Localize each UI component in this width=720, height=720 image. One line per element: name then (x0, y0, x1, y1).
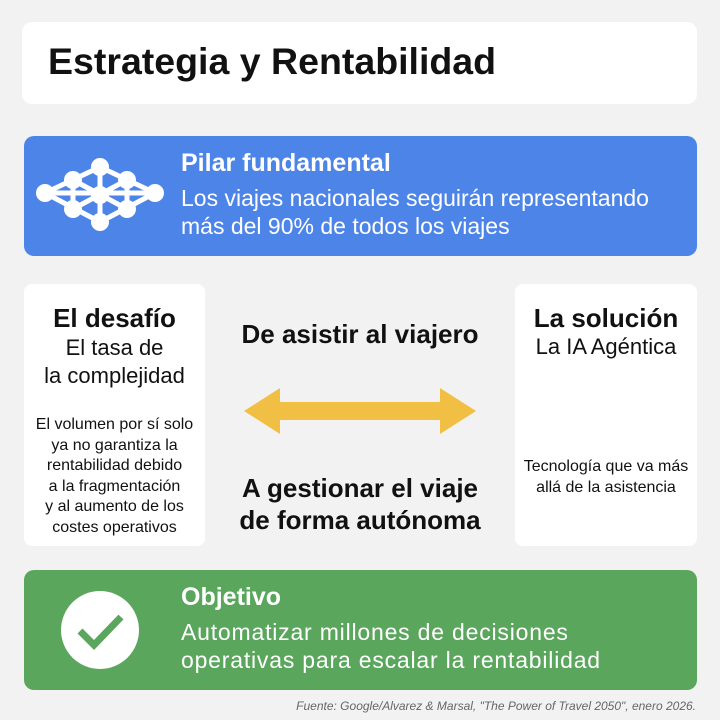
heading: Pilar fundamental (181, 149, 391, 177)
heading: El desafío (53, 303, 176, 333)
panel: el desafío (24, 284, 205, 546)
text (181, 619, 601, 673)
heading: Objetivo (181, 583, 281, 611)
text: y al aumento de los (45, 498, 184, 515)
footer source: Fuente: Google/Alvarez & Marsal, "The Power of Travel 2050", enero 2026. (296, 699, 696, 713)
subheading: la complejidad (44, 363, 185, 388)
text: operativas para escalar la rentabilidad (181, 647, 601, 673)
text: rentabilidad debido (47, 457, 182, 474)
title panel (22, 22, 697, 104)
title: Estrategia y Rentabilidad (48, 40, 496, 82)
text (36, 416, 193, 536)
text: a la fragmentación (49, 478, 180, 495)
text: a gestionar (239, 473, 481, 535)
text: de asistir: De asistir al viajero (241, 319, 479, 349)
text (181, 185, 649, 239)
text: a gestionar: de forma autónoma (239, 505, 481, 535)
panel: objetivo (24, 570, 697, 690)
subheading: El tasa de (66, 335, 163, 360)
text: ya no garantiza la (51, 437, 178, 454)
arrow: double (244, 388, 476, 434)
panel: pilar fundamental (24, 136, 697, 256)
text: El volumen por sí solo (36, 416, 193, 433)
subheading (44, 335, 185, 388)
text (524, 458, 688, 496)
icon: check (61, 591, 139, 669)
heading: La solución (534, 303, 678, 333)
icon: network (36, 158, 164, 231)
text: Tecnología que va más (524, 458, 688, 475)
text: allá de la asistencia (536, 479, 676, 496)
panel: la solución (515, 284, 697, 546)
text: más del 90% de todos los viajes (181, 213, 510, 239)
text: a gestionar: A gestionar el viaje (242, 473, 478, 503)
text: costes operativos (52, 519, 177, 536)
text: Los viajes nacionales seguirán representando (181, 185, 649, 211)
text: Automatizar millones de decisiones (181, 619, 569, 645)
subheading: La IA Agéntica (536, 334, 676, 359)
